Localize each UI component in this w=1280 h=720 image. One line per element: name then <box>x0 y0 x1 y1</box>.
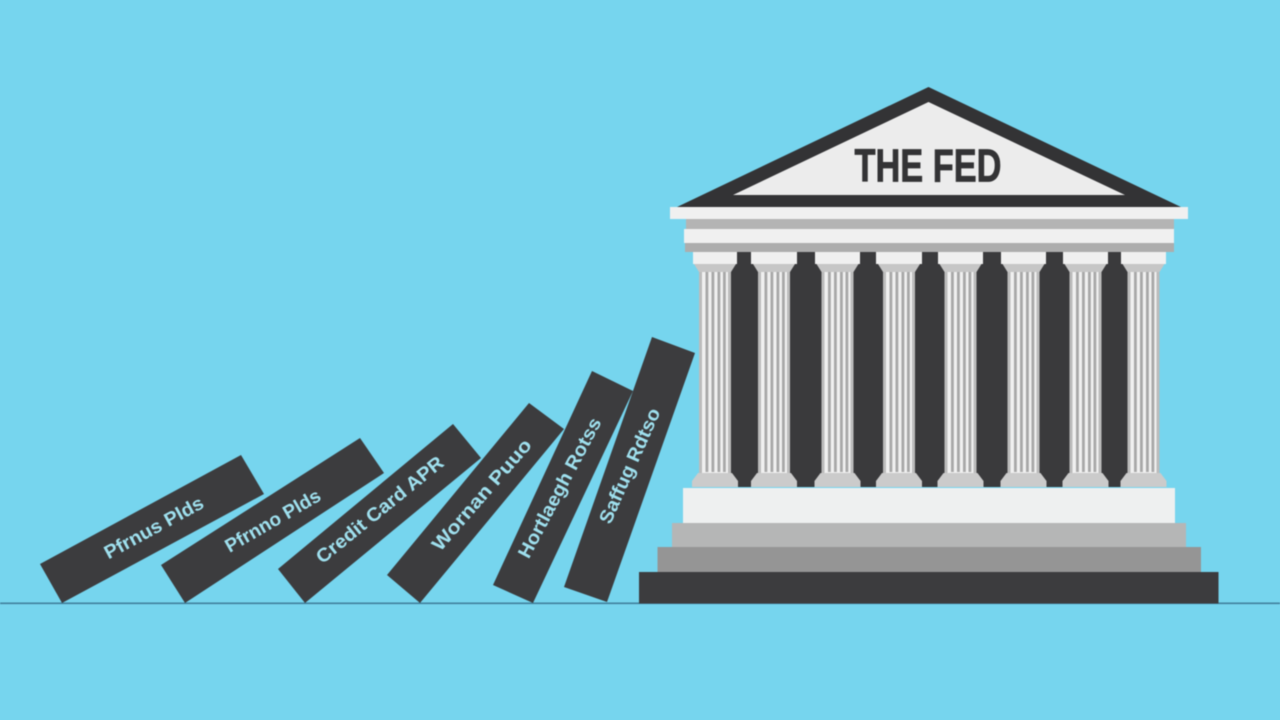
entablature <box>670 207 1188 252</box>
column 7 <box>1062 252 1108 487</box>
column 2 <box>751 252 797 487</box>
domino 4: Wornan Puuo <box>428 435 537 555</box>
domino 6: Saffug Rdtso <box>596 405 665 527</box>
domino 1: Prime Rate: Pfrnus Plds <box>101 493 208 564</box>
pediment roof <box>677 87 1181 207</box>
falling dominoes <box>40 337 695 603</box>
domino 4 <box>387 403 564 603</box>
domino 1: Prime Rate <box>40 455 264 603</box>
colonnade <box>692 252 1166 487</box>
column 5 <box>938 252 984 487</box>
domino 5 <box>493 371 633 603</box>
domino 2: Prime Rate <box>161 438 384 603</box>
column 6 <box>1000 252 1046 487</box>
domino 5: Hortlaegh Rotss <box>515 414 606 562</box>
domino 3: Credit Card APR <box>278 424 481 603</box>
ground line <box>0 602 1280 604</box>
building name: THE FED <box>854 140 1002 192</box>
dark interior wall <box>725 252 1135 487</box>
stepped base <box>639 488 1218 604</box>
domino 6 <box>564 337 695 602</box>
column 3 <box>814 252 860 487</box>
domino 2: Prime Rate: Pfrnno Plds <box>222 486 325 557</box>
bank building: The Fed <box>639 87 1218 604</box>
column 8 <box>1120 252 1166 487</box>
column 1 <box>692 252 738 487</box>
domino 3: Credit Card APR: Credit Card APR <box>312 452 449 568</box>
column 4 <box>876 252 922 487</box>
